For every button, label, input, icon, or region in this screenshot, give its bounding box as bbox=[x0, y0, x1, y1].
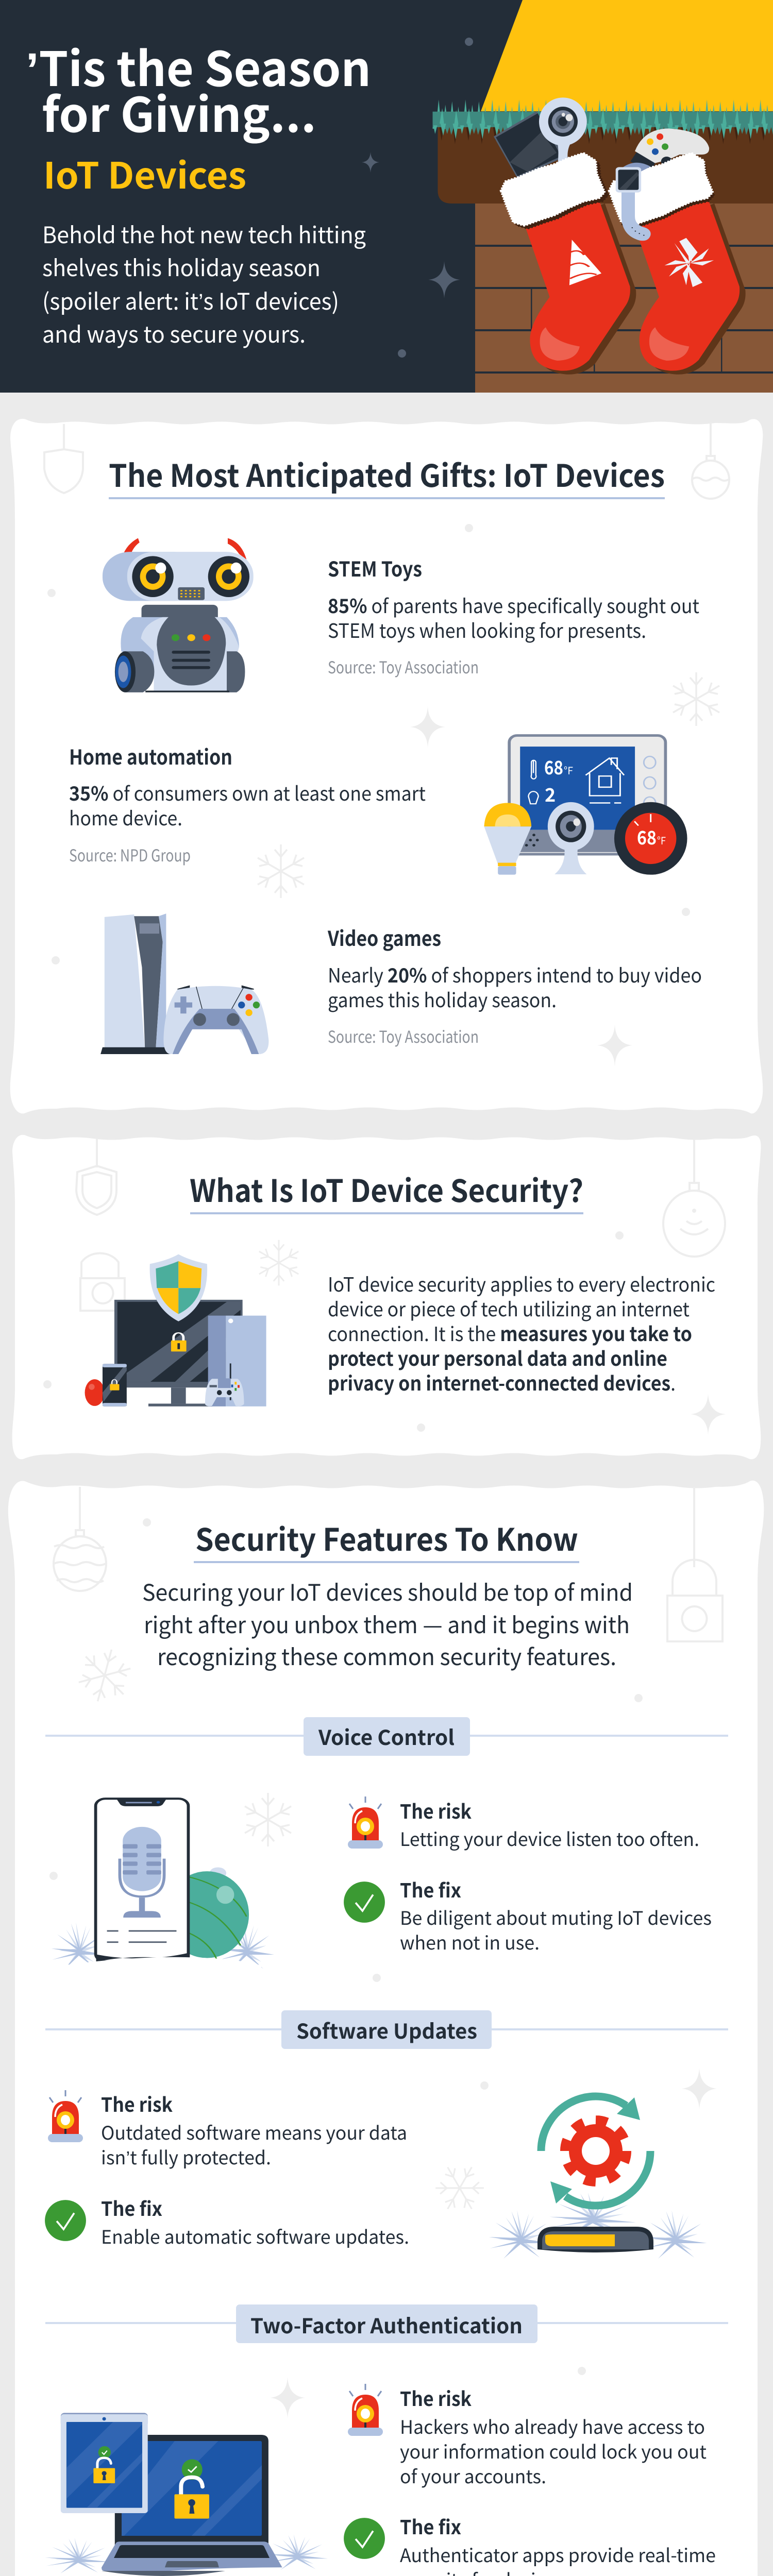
hero decorative stars and dots bbox=[362, 38, 473, 358]
intro text: recognizing these common security features. bbox=[157, 1639, 616, 1672]
hero subtitle: IoT Devices bbox=[43, 147, 246, 199]
icon: risk siren bbox=[48, 2090, 83, 2142]
phone bbox=[103, 1364, 127, 1406]
bricks bbox=[475, 203, 773, 393]
fireplace mantel with stockings bbox=[433, 0, 773, 393]
icon: fix check bbox=[344, 2518, 385, 2559]
left stocking bbox=[525, 200, 630, 371]
text block: video games: Source: Toy Association bbox=[328, 1024, 479, 1048]
icon: fix check bbox=[45, 2200, 86, 2241]
body text: device or piece of tech utilizing an internet bbox=[328, 1294, 690, 1322]
icon: fix check bbox=[344, 1882, 385, 1923]
fix text: Enable automatic software updates. bbox=[101, 2223, 409, 2249]
heading: What Is IoT Device Security? bbox=[190, 1166, 583, 1211]
icon: risk siren bbox=[348, 2384, 383, 2436]
smart camera bbox=[539, 97, 587, 163]
hero title bbox=[26, 31, 371, 146]
risk text bbox=[101, 2089, 407, 2170]
text block: STEM toys: Source: Toy Association bbox=[328, 655, 479, 679]
tablet in stocking bbox=[494, 111, 566, 179]
smart watch bbox=[616, 163, 651, 241]
risk text bbox=[400, 2383, 707, 2489]
fix text: The fix bbox=[400, 2512, 461, 2540]
illustration: smart home devices: °F bbox=[657, 833, 666, 848]
illustration: smart home devices bbox=[484, 736, 687, 875]
text block: home automation: Source: NPD Group bbox=[69, 843, 191, 867]
hero title: ’Tis the Season bbox=[26, 31, 371, 100]
icon: risk siren bbox=[348, 1797, 383, 1849]
panel: security features to know bbox=[8, 1481, 764, 2576]
text block: home automation: 35% of consumers own at least one smart bbox=[69, 778, 426, 806]
hero banner bbox=[0, 0, 773, 393]
fix text: when not in use. bbox=[400, 1928, 540, 1955]
illustration: game console and controller bbox=[100, 913, 268, 1054]
illustration: smart home devices: 2 bbox=[545, 781, 556, 807]
game controller in stocking bbox=[630, 128, 709, 174]
illustration: robot bbox=[103, 538, 254, 692]
risk text: Hackers who already have access to bbox=[400, 2413, 705, 2439]
tablet bbox=[61, 2413, 148, 2513]
hero intro text: and ways to secure yours. bbox=[42, 316, 306, 349]
fix text: The fix bbox=[400, 1875, 461, 1903]
body text bbox=[328, 1269, 715, 1396]
decorative ornaments and snowflakes bbox=[44, 422, 729, 1066]
right stocking bbox=[634, 200, 740, 371]
body text: IoT device security applies to every electronic bbox=[328, 1269, 715, 1297]
fix text bbox=[400, 1875, 712, 1955]
panel: most anticipated gifts bbox=[10, 419, 763, 1113]
section label: software updates bbox=[45, 2010, 728, 2049]
text block: video games bbox=[327, 922, 702, 1048]
text block: home automation: home device. bbox=[69, 803, 182, 831]
body text: connection. It is the measures you take to bbox=[328, 1318, 692, 1347]
hero dark background bbox=[0, 0, 773, 393]
risk text bbox=[400, 1796, 699, 1852]
text block: video games: Video games bbox=[327, 922, 441, 952]
shield bbox=[150, 1255, 207, 1321]
mantel shelf and grass bbox=[433, 94, 773, 204]
fix text: Authenticator apps provide real-time bbox=[400, 2541, 716, 2568]
decorative ornaments and snowflakes bbox=[43, 1139, 726, 1435]
panel: what is IoT device security bbox=[12, 1135, 761, 1459]
decorative ornaments and snowflakes bbox=[49, 1487, 722, 2576]
illustration: smart home devices: 68 bbox=[637, 823, 657, 850]
panel background bbox=[8, 1481, 764, 2576]
heading: The Most Anticipated Gifts: IoT Devices bbox=[109, 451, 665, 496]
hero intro text bbox=[42, 217, 366, 349]
fix text bbox=[400, 2512, 716, 2576]
body text: privacy on internet-connected devices. bbox=[328, 1368, 676, 1396]
intro text bbox=[142, 1574, 633, 1672]
risk text: Letting your device listen too often. bbox=[400, 1825, 699, 1852]
gear bbox=[566, 2121, 626, 2181]
controller bbox=[205, 1378, 244, 1406]
heading: Security Features To Know bbox=[195, 1515, 578, 1560]
text block: STEM toys: STEM toys when looking for presents. bbox=[328, 615, 646, 643]
intro text: Securing your IoT devices should be top of mind bbox=[142, 1574, 633, 1607]
risk text: Outdated software means your data bbox=[101, 2119, 407, 2145]
hero intro text: Behold the hot new tech hitting bbox=[42, 217, 366, 250]
hero title: for Giving... bbox=[42, 77, 316, 146]
hero intro text: (spoiler alert: it’s IoT devices) bbox=[42, 283, 339, 316]
section label: voice control bbox=[45, 1717, 728, 1756]
monitor padlock bbox=[171, 1333, 187, 1351]
panel background bbox=[12, 1135, 761, 1459]
illustration: phone with microphone bbox=[51, 1799, 274, 1974]
illustration: smart home devices: °F bbox=[564, 762, 573, 777]
body text: protect your personal data and online bbox=[328, 1343, 667, 1371]
fix text: Be diligent about muting IoT devices bbox=[400, 1904, 712, 1930]
panel background bbox=[10, 419, 763, 1113]
section label: software updates: Software Updates bbox=[296, 2015, 477, 2045]
stockings bbox=[525, 200, 740, 371]
text block: STEM toys bbox=[328, 553, 699, 679]
intro text: right after you unbox them — and it begins with bbox=[144, 1607, 630, 1640]
illustration: smart home devices: 68 bbox=[544, 753, 563, 780]
illustration: protected devices bbox=[85, 1255, 266, 1406]
risk text: isn’t fully protected. bbox=[101, 2143, 271, 2170]
fix text bbox=[101, 2193, 409, 2249]
text block: STEM toys: 85% of parents have specifically sought out bbox=[328, 590, 699, 619]
text block: STEM toys: STEM Toys bbox=[328, 553, 422, 583]
illustration: update gear with progress bar bbox=[489, 2096, 707, 2259]
risk text: The risk bbox=[400, 2383, 472, 2412]
risk text: The risk bbox=[400, 1796, 472, 1824]
yellow wall bbox=[481, 0, 773, 111]
fur cuffs bbox=[501, 153, 714, 241]
text block: video games: Nearly 20% of shoppers intend to buy video bbox=[328, 960, 702, 988]
text block: video games: games this holiday season. bbox=[328, 985, 557, 1013]
risk text: of your accounts. bbox=[400, 2462, 546, 2489]
section label: two-factor authentication bbox=[45, 2304, 728, 2343]
text block: home automation: Home automation bbox=[69, 741, 232, 771]
section label: voice control: Voice Control bbox=[318, 1721, 455, 1751]
stocking shadows bbox=[531, 204, 746, 375]
risk text: The risk bbox=[101, 2089, 173, 2117]
hero intro text: shelves this holiday season bbox=[42, 250, 321, 283]
section label: two-factor authentication: Two-Factor Authentication bbox=[250, 2310, 523, 2340]
illustration: laptop and tablet with unlocked padlocks bbox=[45, 2413, 328, 2576]
text block: home automation bbox=[69, 741, 426, 867]
fix text: The fix bbox=[101, 2193, 162, 2222]
risk text: your information could lock you out bbox=[400, 2437, 707, 2464]
